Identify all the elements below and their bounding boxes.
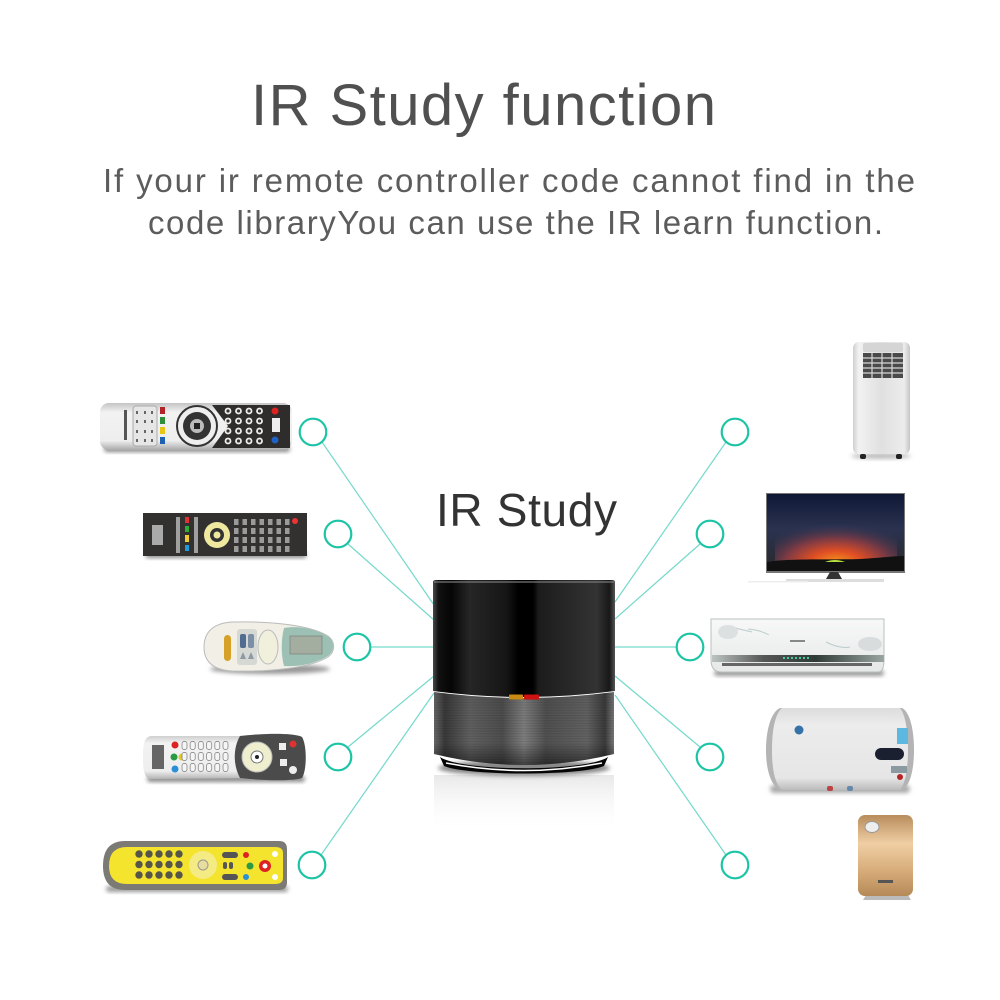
remote 2: [143, 513, 307, 558]
connector circles: [299, 419, 748, 878]
device speaker band: [434, 692, 614, 765]
air purifier: [858, 815, 913, 900]
device black top: [433, 580, 615, 697]
remote 5: [103, 841, 288, 892]
title: IR Study function: [251, 73, 716, 138]
IR Study label: IR Study: [436, 484, 617, 536]
remote 3: [204, 622, 334, 674]
water heater: [766, 708, 914, 793]
portable air conditioner: [851, 342, 911, 459]
device reflection: [434, 775, 614, 833]
description text: [103, 162, 915, 241]
central IR device: [433, 580, 615, 833]
remote 1: [100, 403, 292, 452]
device base shadow: [438, 760, 610, 776]
status lights: [509, 694, 523, 700]
connector lines: [321, 442, 726, 855]
remote 4: [143, 734, 306, 782]
description text: If your ir remote controller code cannot find in the: [103, 162, 915, 199]
device foot: [440, 757, 608, 774]
split air conditioner: [711, 619, 884, 676]
description text: code libraryYou can use the IR learn function.: [148, 204, 883, 241]
television: [748, 493, 905, 582]
